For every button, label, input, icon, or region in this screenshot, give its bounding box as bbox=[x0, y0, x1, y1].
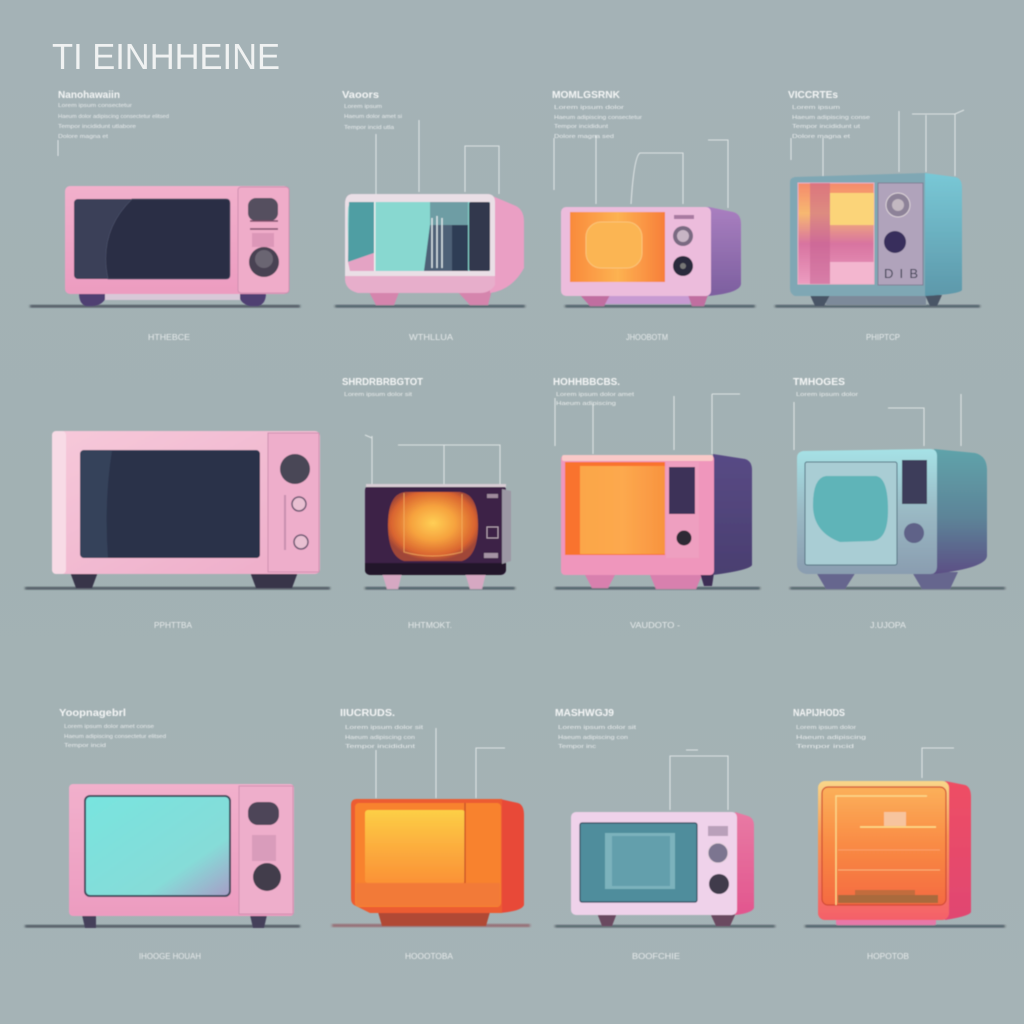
card 3 annotation bbox=[552, 90, 728, 208]
card 2 floor shadow bbox=[335, 305, 525, 308]
card 8 side bbox=[934, 449, 987, 574]
card 6 glass outline bbox=[404, 493, 462, 556]
card 7 caption: VAUDOTO - bbox=[630, 620, 680, 630]
card 5 floor shadow bbox=[25, 587, 330, 590]
card 8: teal television style bbox=[790, 377, 1005, 630]
card 12 annotation: Tempor incid bbox=[796, 744, 854, 750]
card 11 caption: BOOFCHIE bbox=[632, 951, 680, 961]
card 7 annotation: Lorem ipsum dolor amet bbox=[556, 392, 635, 398]
card 11 annotation: Tempor inc bbox=[558, 744, 596, 750]
card 6 feet bbox=[382, 573, 486, 589]
card 9 panel bbox=[239, 786, 293, 914]
card 10 annotation: Lorem ipsum dolor sit bbox=[345, 725, 424, 731]
card 7 top edge bbox=[562, 455, 713, 461]
card 10 annotation: Tempor incididunt bbox=[345, 744, 416, 750]
card 7 annotation: HOHHBBCBS. bbox=[553, 377, 620, 388]
card 2 annotation: Vaoors bbox=[342, 90, 379, 101]
card 10 lower band bbox=[356, 883, 500, 906]
card 9 floor shadow bbox=[25, 925, 300, 928]
card 6 panel details bbox=[484, 494, 498, 558]
card 4: blue microwave, sunset screen bbox=[775, 90, 980, 342]
card 12 caption: HOPOTOB bbox=[867, 951, 909, 961]
card 4 floor shadow bbox=[775, 305, 980, 308]
card 6 caption: HHTMOKT. bbox=[408, 620, 452, 630]
card 11 screen bbox=[580, 823, 697, 902]
card 11 floor shadow bbox=[555, 925, 775, 928]
card 12 annotation: Haeum adipiscing bbox=[796, 735, 866, 741]
card 4 annotation: Dolore magna et bbox=[792, 134, 851, 140]
card 8 caption: J.UJOPA bbox=[870, 620, 906, 630]
card 9 annotation: Tempor incid bbox=[64, 743, 106, 749]
card 12 screen bbox=[822, 787, 946, 905]
card 4 knobs: D I B bbox=[884, 266, 918, 281]
card 12 feet bbox=[836, 918, 936, 925]
card 12 annotation: Lorem ipsum dolor bbox=[796, 725, 856, 731]
card 12 shelves bbox=[838, 812, 940, 903]
card 3 knobs bbox=[673, 215, 694, 276]
card 1 floor shadow bbox=[30, 305, 300, 308]
card 6 annotation: Lorem ipsum dolor sit bbox=[344, 392, 413, 398]
card 11 annotation: Haeum adipiscing con bbox=[558, 735, 628, 741]
card 9 annotation bbox=[59, 708, 166, 749]
card 11 screen center bbox=[612, 836, 670, 886]
card 7 floor shadow bbox=[555, 587, 760, 590]
card 12 annotation bbox=[793, 708, 954, 778]
card 2 screen detail bbox=[348, 202, 490, 271]
card 4 panel bbox=[878, 183, 923, 285]
card 5: large pink microwave bbox=[25, 431, 330, 630]
card 10 screen divider bbox=[464, 803, 466, 905]
card 1 screen bbox=[74, 199, 230, 279]
card 8 body bbox=[797, 449, 937, 574]
card 7 screen inner bbox=[580, 466, 665, 554]
card 5 feet bbox=[70, 572, 298, 588]
card 11 feet bbox=[597, 913, 736, 926]
card 7 screen bbox=[565, 462, 665, 555]
card 4 knobs bbox=[884, 193, 918, 281]
card 7 panel bbox=[666, 462, 699, 558]
card 7 display bbox=[669, 467, 695, 514]
card 10 body bbox=[351, 799, 502, 913]
card 6 annotation bbox=[342, 377, 500, 486]
card 2 annotation: Haeum dolor amet si bbox=[344, 114, 402, 120]
card 11 annotation bbox=[555, 708, 728, 810]
card 8 knob bbox=[904, 523, 924, 543]
card 6 top edge bbox=[366, 484, 506, 487]
card 11 knobs bbox=[708, 826, 729, 894]
card 12 floor shadow bbox=[805, 925, 1005, 928]
card 10: orange microwave bbox=[332, 708, 530, 961]
card 8 annotation: TMHOGES bbox=[793, 377, 845, 388]
card 4 feet bbox=[810, 295, 942, 306]
card 1: pink microwave, dark screen bbox=[30, 90, 300, 342]
card 11: pale lilac microwave bbox=[555, 708, 775, 961]
card 3 floor shadow bbox=[565, 305, 755, 308]
card 10 side bbox=[500, 799, 524, 913]
card 3 body bbox=[561, 207, 711, 296]
card 9 screen bbox=[85, 796, 230, 896]
card 1 annotation bbox=[58, 90, 169, 156]
card 4 annotation bbox=[788, 90, 964, 176]
card 1 screen reflection bbox=[106, 199, 230, 279]
card 12 body bbox=[818, 781, 949, 920]
card 6 lower band bbox=[365, 563, 506, 575]
card 3 glow bbox=[586, 222, 642, 268]
card 1 annotation: Dolore magna et bbox=[58, 134, 109, 140]
title: TI EINHHEINE bbox=[52, 36, 280, 77]
card 7 side bbox=[713, 454, 752, 575]
card 8 annotation bbox=[793, 377, 961, 450]
card 2 annotation: Tempor incid utla bbox=[344, 125, 395, 131]
card 11 screen inner bbox=[605, 833, 675, 889]
card 6 annotation: SHRDRBRBGTOT bbox=[342, 377, 423, 388]
card 3 annotation: Haeum adipiscing consectetur bbox=[554, 115, 642, 121]
card 3 caption: JHOOBOTM bbox=[626, 332, 668, 342]
card 9 body bbox=[69, 784, 294, 916]
card 7 knob bbox=[676, 530, 692, 546]
card 6 glow bbox=[388, 492, 478, 561]
card 4 annotation: Tempor incididunt ut bbox=[792, 124, 861, 130]
card 1 knobs bbox=[248, 198, 279, 277]
card 4 screen bbox=[798, 183, 874, 284]
card 3 annotation: Tempor incididunt bbox=[554, 124, 609, 130]
card 12 side bbox=[945, 781, 971, 920]
card 11 annotation: MASHWGJ9 bbox=[555, 708, 614, 719]
card 5 knobs bbox=[280, 454, 310, 550]
card 7 annotation: Haeum adipiscing bbox=[556, 401, 616, 407]
card 10 screen frame bbox=[355, 803, 501, 907]
card 9 caption: IHOOGE HOUAH bbox=[139, 951, 201, 961]
card 8 door bbox=[805, 462, 897, 565]
card 1 annotation: Haeum dolor adipiscing consectetur elitsed bbox=[58, 114, 169, 120]
card 1 underside bbox=[105, 294, 240, 300]
card 2 side bbox=[490, 195, 524, 293]
card 2 caption: WTHLLUA bbox=[409, 332, 453, 342]
card 12 annotation: NAPIJHODS bbox=[793, 708, 845, 719]
card 2 body bbox=[345, 194, 495, 293]
card 4 body bbox=[790, 173, 925, 296]
card 4 annotation: VICCRTEs bbox=[788, 90, 838, 101]
card 3 annotation: Lorem ipsum dolor bbox=[554, 105, 624, 111]
card 1 caption: HTHEBCE bbox=[148, 332, 190, 342]
card 8 display bbox=[902, 460, 927, 504]
card 4 screen detail bbox=[810, 183, 874, 284]
card 3: orange screen, purple side bbox=[552, 90, 755, 342]
card 2 top rim bbox=[345, 194, 495, 276]
card 7 feet bbox=[584, 573, 702, 589]
card 1 feet bbox=[79, 293, 266, 306]
card 3 feet bbox=[580, 295, 708, 306]
card 10 base bbox=[378, 912, 490, 926]
card 4 base bbox=[826, 295, 926, 305]
card 2 screen bbox=[348, 202, 490, 271]
card 11 side bbox=[735, 812, 754, 915]
card 8 screen bbox=[813, 476, 888, 542]
card 3 side bbox=[702, 207, 741, 296]
card 6 body bbox=[365, 485, 506, 575]
card 9 annotation: Lorem ipsum dolor amet conse bbox=[64, 724, 154, 730]
card 7 body bbox=[561, 455, 714, 575]
card 1 body bbox=[65, 186, 289, 294]
card 5 caption: PPHTTBA bbox=[154, 620, 192, 630]
card 5 screen reflection bbox=[107, 451, 260, 558]
card 6 floor shadow bbox=[365, 587, 515, 590]
card 8 feet bbox=[816, 572, 958, 589]
card 5 panel bbox=[268, 433, 319, 572]
card 4 annotation: Haeum adipiscing conse bbox=[792, 115, 870, 121]
card 3 base bbox=[605, 295, 690, 304]
card 5 body bbox=[52, 431, 320, 574]
card 7 annotation bbox=[553, 377, 740, 454]
card 9: pink microwave, aqua screen bbox=[25, 708, 300, 961]
card 6 grille bbox=[502, 489, 511, 564]
card 1 annotation: Lorem ipsum consectetur bbox=[58, 103, 132, 109]
card 10 caption: HOOOTOBA bbox=[405, 951, 453, 961]
card 4 annotation: Lorem ipsum bbox=[792, 105, 841, 111]
card 8 annotation: Lorem ipsum dolor bbox=[796, 392, 858, 398]
card 10 annotation: IIUCRUDS. bbox=[340, 708, 395, 719]
card 10 screen bbox=[365, 810, 465, 883]
card 11 body bbox=[571, 812, 737, 915]
card 12: orange oven with red side bbox=[793, 708, 1005, 961]
card 8 floor shadow bbox=[790, 587, 1005, 590]
card 9 annotation: Yoopnagebrl bbox=[59, 708, 126, 719]
card 5 left edge bbox=[52, 431, 66, 574]
card 2: pink microwave, teal screen bbox=[335, 90, 525, 342]
card 9 feet bbox=[82, 915, 267, 928]
card 10 annotation: Haeum adipiscing con bbox=[345, 735, 415, 741]
card 1 annotation: Nanohawaiin bbox=[58, 90, 120, 101]
card 9 knobs bbox=[248, 802, 281, 891]
card 11 annotation: Lorem ipsum dolor sit bbox=[558, 725, 637, 731]
card 10 annotation bbox=[340, 708, 505, 798]
card 3 annotation: Dolore magna sed bbox=[554, 134, 614, 140]
card 6: dark microwave with glow bbox=[342, 377, 515, 630]
card 1 annotation: Tempor incididunt utlabore bbox=[58, 124, 136, 130]
card 7: orange screen, dark purple side bbox=[553, 377, 760, 630]
card 3 screen bbox=[570, 212, 665, 282]
card 7 rear foot bbox=[700, 573, 714, 586]
card 4 caption: PHIPTCP bbox=[866, 332, 900, 342]
card 2 annotation: Lorem ipsum bbox=[344, 104, 382, 110]
card 2 feet bbox=[368, 290, 492, 305]
card 9 annotation: Haeum adipiscing consectetur elitsed bbox=[64, 734, 166, 740]
card 2 annotation bbox=[342, 90, 499, 194]
card 4 side bbox=[925, 173, 962, 296]
card 3 annotation: MOMLGSRNK bbox=[552, 90, 621, 101]
card 10 floor shadow bbox=[332, 924, 530, 927]
card 1 panel bbox=[238, 187, 289, 293]
card 5 screen bbox=[80, 450, 260, 558]
card 12 inner frame bbox=[836, 796, 927, 905]
